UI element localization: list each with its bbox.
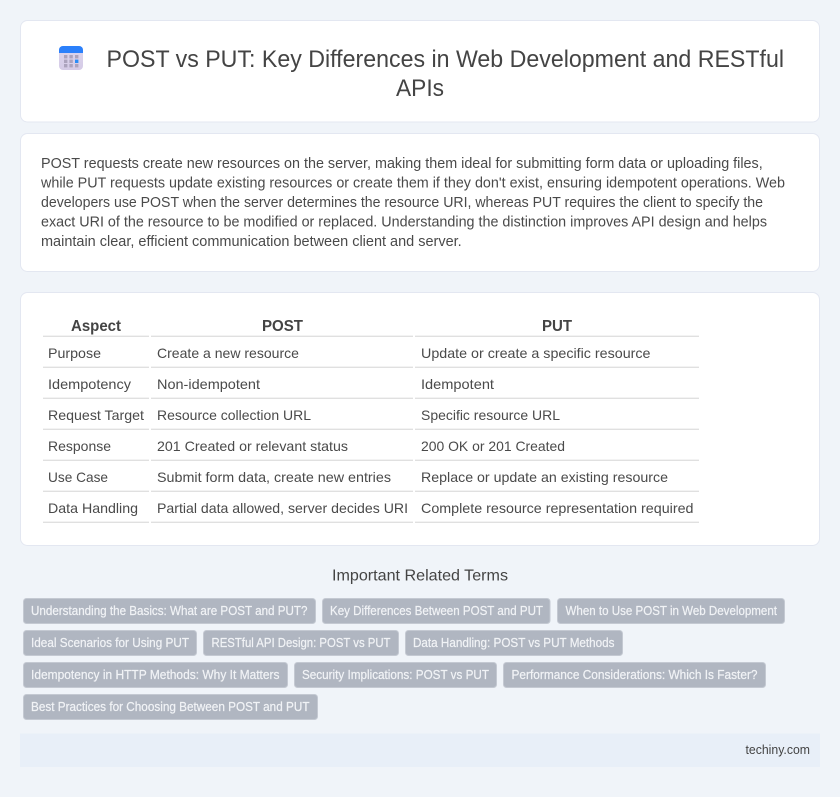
- panel: introduction text: developers use POST when the server determines the resource URI, whereas PUT requires the client to specify the: [41, 195, 763, 211]
- table row: Response: Response: [48, 438, 111, 454]
- title: APIs: [396, 75, 444, 102]
- tag: [406, 630, 622, 656]
- tag: [24, 598, 316, 624]
- tag: Best Practices for Choosing Between POST and PUT: [31, 699, 310, 714]
- tag: [24, 662, 288, 688]
- tag: RESTful API Design: POST vs PUT: [212, 635, 391, 650]
- tag: Key Differences Between POST and PUT: [330, 603, 543, 618]
- table row: Data Handling: [43, 500, 699, 522]
- panel: introduction text: maintain clear, efficient communication between client and server.: [41, 234, 462, 250]
- table row: Purpose: Update or create a specific resource: [421, 345, 651, 361]
- tag: [558, 598, 784, 624]
- footer: [20, 734, 820, 767]
- table row: Use Case: Use Case: [48, 469, 108, 485]
- title: POST vs PUT: Key Differences in Web Development and RESTful: [106, 46, 784, 73]
- table row: Data Handling: Data Handling: [48, 500, 138, 516]
- tag: [24, 630, 196, 656]
- table row: Idempotency: Idempotent: [421, 376, 494, 392]
- table row: Data Handling: Partial data allowed, server decides URI: [157, 500, 408, 516]
- table row: Response: 200 OK or 201 Created: [421, 438, 565, 454]
- table row: Request Target: Specific resource URL: [421, 407, 560, 423]
- title: [106, 46, 784, 102]
- tag: [24, 694, 318, 720]
- panel: introduction text: [20, 134, 820, 272]
- table row: Idempotency: Idempotency: [48, 376, 131, 392]
- panel: comparison table: [20, 292, 820, 546]
- panel: introduction text: exact URI of the resource to be modified or replaced. Understanding the distinction improves API design and helps: [41, 214, 767, 230]
- tag: When to Use POST in Web Development: [566, 603, 777, 618]
- table row: Idempotency: Non-idempotent: [157, 376, 260, 392]
- panel: introduction text: POST requests create new resources on the server, making them ideal for submitting form data or uploading files,: [41, 156, 763, 172]
- tag: Ideal Scenarios for Using PUT: [31, 635, 189, 650]
- table header row: PUT: [542, 318, 572, 335]
- tag: Security Implications: POST vs PUT: [302, 667, 489, 682]
- table row: Idempotency: [43, 376, 699, 398]
- table row: Request Target: Resource collection URL: [157, 407, 311, 423]
- table row: Purpose: Create a new resource: [157, 345, 299, 361]
- table row: Response: [43, 438, 699, 460]
- table row: Use Case: Replace or update an existing resource: [421, 469, 668, 485]
- tag: Performance Considerations: Which Is Faster?: [512, 667, 758, 682]
- tag: [204, 630, 398, 656]
- tag: Understanding the Basics: What are POST and PUT?: [31, 603, 308, 618]
- panel: header: [20, 20, 820, 122]
- tag: Data Handling: POST vs PUT Methods: [413, 635, 614, 650]
- icon: calendar: [59, 46, 83, 70]
- table header row: Aspect: [71, 318, 122, 335]
- heading: related terms: Important Related Terms: [332, 568, 508, 584]
- tag: [322, 598, 550, 624]
- panel: related term tags: [24, 598, 784, 720]
- table header row: [43, 318, 699, 336]
- table row: Use Case: [43, 469, 699, 491]
- footer: techiny.com: [746, 742, 810, 757]
- table row: Data Handling: Complete resource representation required: [421, 500, 694, 516]
- tag: [294, 662, 496, 688]
- table row: Request Target: [43, 407, 699, 429]
- table row: Purpose: Purpose: [48, 345, 101, 361]
- panel: introduction text: while PUT requests update existing resources or create them if they don't exist, ensuring idempotent operations. Web: [40, 176, 785, 192]
- table row: Purpose: [43, 345, 699, 367]
- tag: [504, 662, 766, 688]
- table header row: POST: [262, 318, 303, 335]
- table row: Request Target: Request Target: [48, 407, 144, 423]
- tag: Idempotency in HTTP Methods: Why It Matters: [31, 667, 280, 682]
- table row: Use Case: Submit form data, create new entries: [157, 469, 391, 485]
- table row: Response: 201 Created or relevant status: [157, 438, 348, 454]
